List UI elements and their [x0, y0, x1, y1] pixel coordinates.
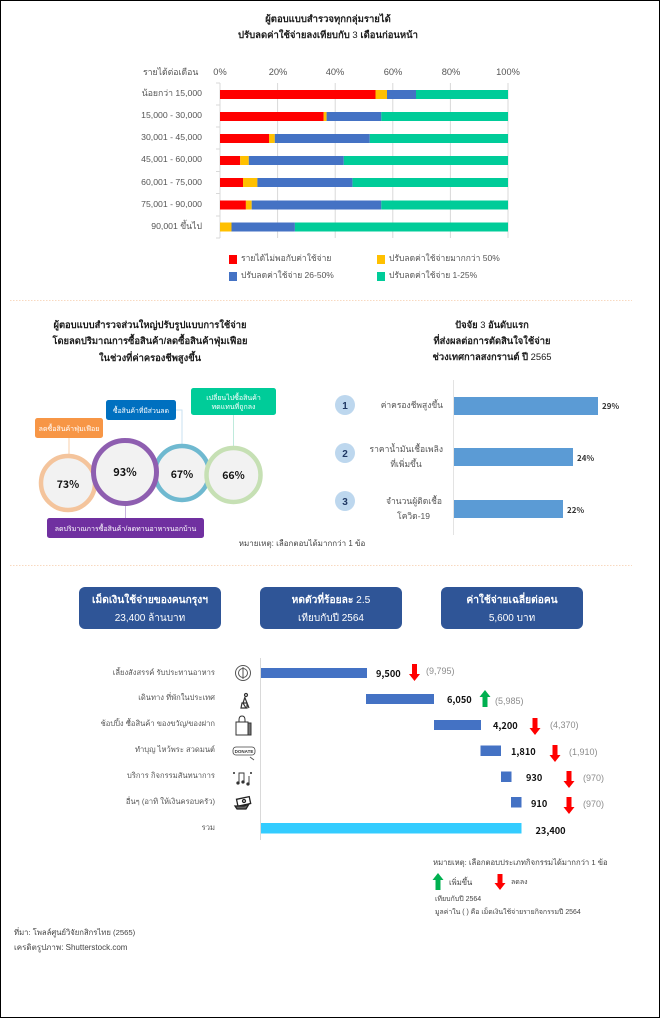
income row labels: 15,000 - 30,000	[141, 110, 202, 120]
title: spending adjustment	[51, 319, 248, 364]
bar: other: 910	[531, 796, 547, 810]
title: spending adjustment: โดยลดปริมาณการซื้อสินค้า/ลดซื้อสินค้าฟุ่มเฟือย	[51, 333, 248, 347]
bubble: 67%: 67%	[171, 467, 193, 482]
axis labels: 40%	[326, 67, 344, 77]
factor 2	[335, 443, 594, 469]
axis labels: 60%	[384, 67, 402, 77]
bar: dining: 9,500	[376, 666, 401, 680]
bar: recreation	[501, 770, 604, 788]
bubble diagram: spending behaviours	[35, 388, 276, 538]
legend: stacked bar: รายได้ไม่พอกับค่าใช้จ่าย	[241, 253, 331, 263]
bar: merit making: (1,910)	[569, 747, 598, 757]
bubble: 93%	[94, 440, 156, 504]
bar: recreation: (970)	[583, 773, 604, 783]
factor 1: 1	[342, 401, 348, 412]
stat box: total spending: เม็ดเงินใช้จ่ายของคนกรุงฯ	[92, 592, 208, 607]
income row labels: 90,001 ขึ้นไป	[151, 219, 202, 231]
factor 3: 3	[342, 497, 348, 508]
bar: total: 23,400	[536, 823, 566, 837]
activity labels	[101, 667, 215, 832]
axis labels	[143, 67, 520, 77]
activity labels: รวม	[202, 823, 215, 832]
bar: dining: (9,795)	[426, 666, 455, 676]
income row labels: 60,001 - 75,000	[141, 177, 202, 187]
callout: reduce quantity	[47, 518, 204, 538]
bar: shopping: 4,200	[493, 718, 518, 732]
title: top 3 factors: ปัจจัย 3 อันดับแรก	[455, 319, 529, 330]
note and arrow legend	[432, 858, 608, 916]
source and credit: เครดิตรูปภาพ: Shutterstock.com	[14, 943, 128, 953]
stat box: decline: หดตัวที่ร้อยละ 2.5	[292, 592, 371, 606]
note: multiple answers: หมายเหตุ: เลือกตอบได้มากกว่า 1 ข้อ	[239, 539, 365, 548]
icon: donate: DONATE	[235, 749, 253, 754]
title: income groups: ผู้ตอบแบบสำรวจทุกกลุ่มรายได้	[265, 13, 391, 26]
legend: stacked bar: ปรับลดค่าใช้จ่าย 1-25%	[389, 270, 478, 280]
callout: discounted goods	[106, 400, 176, 420]
bar: merit making: 1,810	[511, 744, 536, 758]
bar chart: top 3 factors	[335, 380, 619, 535]
bubble: 73%	[41, 456, 95, 510]
icon: dining	[236, 666, 250, 680]
title: spending adjustment: ในช่วงที่ค่าครองชีพสูงขึ้น	[99, 350, 202, 364]
factor 3	[335, 491, 584, 521]
bubble: 73%: 73%	[57, 477, 79, 492]
title: top 3 factors	[432, 319, 552, 362]
legend: stacked bar: ปรับลดค่าใช้จ่าย 26-50%	[241, 270, 334, 280]
note and arrow legend: ลดลง	[511, 879, 528, 886]
factor 1	[335, 395, 619, 415]
icon: music notes	[233, 772, 252, 785]
bar: other: (970)	[583, 799, 604, 809]
legend: stacked bar	[229, 253, 500, 281]
axis labels: 0%	[213, 67, 227, 77]
bar: other	[511, 796, 604, 814]
icon: donate	[233, 747, 255, 760]
row: 45,001-60,000	[220, 156, 508, 165]
factor 2: 2	[342, 449, 348, 460]
factor 1: ค่าครองชีพสูงขึ้น	[381, 399, 443, 411]
stat box: decline: เทียบกับปี 2564	[298, 612, 364, 624]
stacked bar chart: expense reduction by income	[141, 67, 520, 238]
source and credit: ที่มา: โพลล์ศูนย์วิจัยกสิกรไทย (2565)	[14, 927, 136, 938]
factor 2: 24%	[577, 453, 594, 464]
waterfall chart: spending by activity	[101, 658, 604, 840]
callout: luxury: ลดซื้อสินค้าฟุ่มเฟือย	[39, 422, 99, 433]
callout: luxury	[35, 418, 103, 438]
income row labels: 30,001 - 45,000	[141, 132, 202, 142]
factor 3: จำนวนผู้ติดเชื้อ	[386, 495, 442, 507]
stat box: average per person: ค่าใช้จ่ายเฉลี่ยต่อคน	[466, 592, 558, 606]
activity labels: เดินทาง ที่พักในประเทศ	[138, 692, 215, 702]
bar: travel	[366, 690, 524, 707]
activity labels: อื่นๆ (อาทิ ให้เงินครอบครัว)	[125, 796, 215, 806]
axis labels: 20%	[269, 67, 287, 77]
bar: dining	[261, 664, 455, 681]
bubble: 67%	[155, 446, 209, 500]
income row labels	[141, 88, 202, 231]
source and credit	[14, 927, 136, 953]
note and arrow legend: เทียบกับปี 2564	[435, 895, 481, 903]
stat box: average per person	[441, 587, 583, 629]
icon: shopping bag	[236, 716, 251, 735]
stat box: total spending	[79, 587, 221, 629]
note and arrow legend: มูลค่าใน ( ) คือ เม็ดเงินใช้จ่ายรายกิจกรรมปี 2564	[435, 907, 581, 916]
axis labels: 100%	[496, 67, 520, 77]
bar: total	[261, 823, 566, 837]
stat box: total spending: 23,400 ล้านบาท	[115, 612, 185, 624]
title: income groups	[238, 13, 418, 41]
note and arrow legend: หมายเหตุ: เลือกตอบประเภทกิจกรรมได้มากกว่า 1 ข้อ	[433, 858, 608, 867]
factor 2: ราคาน้ำมันเชื้อเพลิง	[370, 443, 443, 454]
row: below 15,000	[220, 90, 508, 99]
callout: cheaper substitutes: เปลี่ยนไปซื้อสินค้า	[206, 391, 261, 402]
bar: shopping	[434, 718, 579, 735]
title: top 3 factors: ที่ส่งผลต่อการตัดสินใจใช้จ่าย	[434, 334, 550, 346]
factor 3: โควิด-19	[397, 511, 430, 521]
row: 30,001-45,000	[220, 134, 508, 143]
row: 75,001-90,000	[220, 200, 508, 210]
stat box: decline	[260, 587, 402, 629]
bar: recreation: 930	[526, 770, 542, 784]
stat box: average per person: 5,600 บาท	[489, 613, 535, 624]
title: income groups: ปรับลดค่าใช้จ่ายลงเทียบกับ 3 เดือนก่อนหน้า	[238, 29, 418, 41]
bar: travel: 6,050	[447, 692, 472, 706]
axis labels: รายได้ต่อเดือน	[143, 67, 198, 77]
bar: shopping: (4,370)	[550, 720, 579, 730]
income row labels: น้อยกว่า 15,000	[142, 88, 202, 98]
title: top 3 factors: ช่วงเทศกาลสงกรานต์ ปี 2565	[432, 351, 552, 362]
income row labels: 45,001 - 60,000	[141, 154, 202, 164]
activity labels: บริการ กิจกรรมสันทนาการ	[127, 771, 215, 780]
activity labels: เลี้ยงสังสรรค์ รับประทานอาหาร	[113, 667, 215, 677]
income row labels: 75,001 - 90,000	[141, 199, 202, 209]
bar: merit making	[480, 744, 598, 762]
icon: money in hand	[235, 797, 251, 809]
title: spending adjustment: ผู้ตอบแบบสำรวจส่วนใหญ่ปรับรูปแบบการใช้จ่าย	[53, 319, 247, 331]
note and arrow legend: เพิ่มขึ้น	[449, 876, 473, 887]
factor 2: ที่เพิ่มขึ้น	[390, 458, 422, 469]
bubble: 66%	[206, 448, 260, 502]
activity labels: ทำบุญ ไหว้พระ สวดมนต์	[135, 745, 215, 754]
callout: cheaper substitutes	[191, 388, 276, 415]
callout: reduce quantity: ลดปริมาณการซื้อสินค้า/ลดทานอาหารนอกบ้าน	[55, 522, 196, 533]
callout: discounted goods: ซื้อสินค้าที่มีส่วนลด	[113, 405, 169, 415]
legend: stacked bar: ปรับลดค่าใช้จ่ายมากกว่า 50%	[389, 253, 500, 263]
row: 15,000-30,000	[220, 112, 508, 121]
callout: cheaper substitutes: ทดแทนที่ถูกลง	[212, 402, 255, 411]
factor 1: 29%	[602, 401, 619, 412]
activity labels: ช้อปปิ้ง ซื้อสินค้า ของขวัญ/ของฝาก	[101, 718, 215, 728]
bubble: 66%: 66%	[222, 468, 245, 483]
row: 60,001-75,000	[220, 178, 508, 187]
icon: traveller	[241, 694, 249, 708]
row: 90,001 and up	[220, 222, 508, 232]
bubble: 93%: 93%	[113, 464, 137, 480]
bar: travel: (5,985)	[495, 696, 524, 706]
factor 3: 22%	[567, 505, 584, 516]
axis labels: 80%	[442, 67, 460, 77]
